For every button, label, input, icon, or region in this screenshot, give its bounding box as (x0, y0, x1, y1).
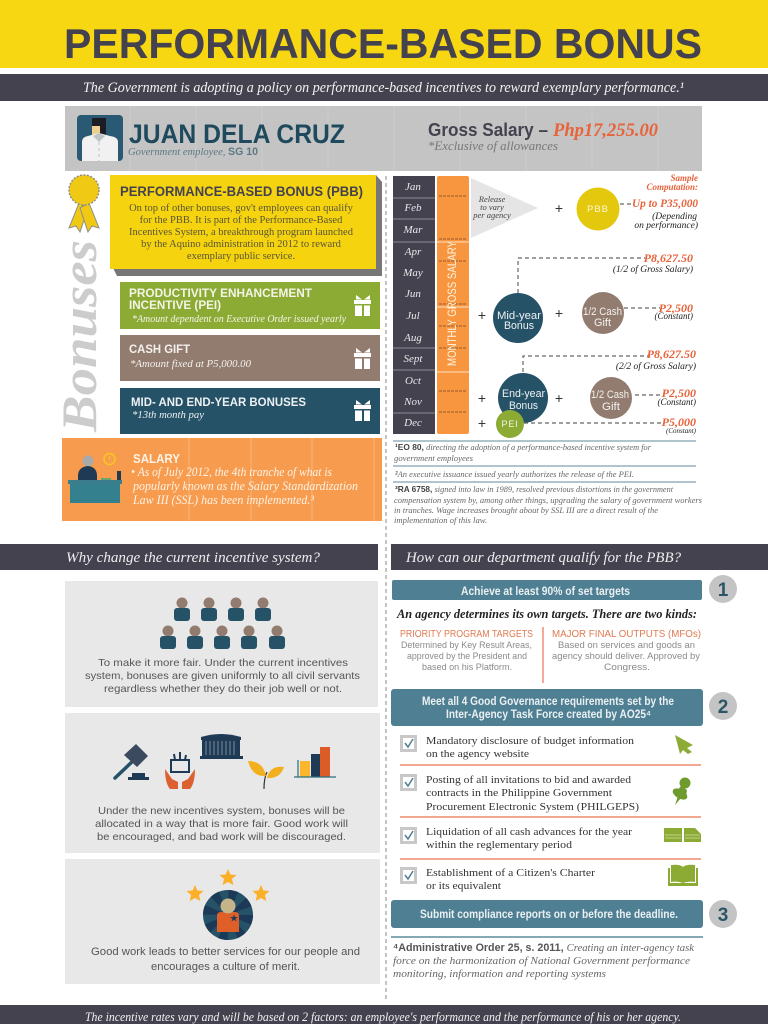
end-year row: Bonus (509, 400, 538, 412)
target types: based on his Platform. (422, 662, 512, 673)
footnotes 1 to 3 (393, 441, 703, 525)
end-year row: (2/2 of Gross Salary) (616, 361, 696, 372)
icon: cursor (675, 735, 693, 754)
release triangle (471, 178, 538, 238)
panel: PEI: INCENTIVE (PEI) (129, 298, 221, 312)
chart: monthly gross salary column: MONTHLY GROSS SALARY (447, 241, 459, 366)
panel: PBB: On top of other bonuses, gov't employees can qualify (129, 203, 354, 214)
step 3: Submit compliance reports on or before the deadline. (420, 909, 678, 921)
step 1: Achieve at least 90% of set targets (461, 586, 630, 598)
release triangle: per agency (472, 210, 511, 220)
target types: PRIORITY PROGRAM TARGETS (400, 629, 533, 640)
footnotes 1 to 3: ³RA 6758, signed into law in 1989, resolved previous distortions in the government (395, 484, 674, 494)
requirements checklist: Posting of all invitations to bid and awarded (426, 774, 632, 786)
PBB row: + (555, 200, 563, 216)
footnotes 1 to 3: compensation system by, among other things, upgrading the salary of government workers (394, 495, 703, 505)
chart: calendar column: Mar (403, 224, 423, 236)
panel: PBB: exemplary public service. (187, 251, 295, 262)
chart: calendar column: Jul (406, 310, 420, 322)
divider (385, 176, 387, 1000)
PEI row: PEI (502, 419, 518, 429)
icon: gift (354, 348, 371, 369)
checkbox 4 (402, 868, 416, 882)
chart: calendar column: Nov (403, 396, 422, 408)
footer bar (0, 1005, 768, 1024)
step number 2: 2 (718, 697, 728, 718)
icon: employee avatar (77, 115, 123, 161)
chart: calendar column (393, 176, 435, 434)
step number 1: 1 (718, 580, 729, 601)
PBB row: (Depending (652, 211, 697, 222)
PBB row (555, 188, 698, 231)
mid-year row: (Constant) (654, 311, 693, 321)
footnote 4: ⁴Administrative Order 25, s. 2011, Creating an inter-agency task (393, 942, 695, 954)
icon: official at desk (68, 454, 122, 503)
gross salary: *Exclusive of allowances (428, 138, 558, 153)
target types: Congress. (604, 662, 650, 673)
panel: fairness: To make it more fair. Under the current incentives (98, 657, 348, 669)
panel: employee profile (65, 106, 702, 171)
panel: mid- and end-year bonuses: MID- AND END-YEAR BONUSES (131, 395, 306, 409)
step 1 (392, 575, 737, 603)
target types: Determined by Key Result Areas, (401, 640, 532, 651)
requirements checklist: Liquidation of all cash advances for the year (426, 826, 632, 838)
panel: PBB: Incentives System, a breakthrough program launched (129, 227, 354, 238)
gross salary: Php17,255.00 (552, 120, 658, 141)
target types: approved by the President and (407, 651, 527, 662)
mid-year row: Mid-year (497, 310, 541, 322)
step 3 (391, 900, 737, 928)
PEI row (478, 410, 697, 438)
panel: culture of merit: Good work leads to better services for our people and (91, 946, 360, 958)
chart: calendar column: Jun (405, 288, 421, 300)
footnote 4 (391, 937, 703, 980)
title: PERFORMANCE-BASED BONUS (64, 20, 702, 67)
end-year row (478, 347, 696, 423)
panel: new system: allocated in a way that is more fair. Good work will (95, 818, 348, 830)
panel: salary: popularly known as the Salary Standardization (132, 479, 358, 493)
chart: calendar column: Jan (405, 181, 421, 193)
header banner (0, 0, 768, 68)
step 2: Meet all 4 Good Governance requirements set by the (422, 696, 674, 708)
icon: stacks of money (664, 828, 701, 842)
end-year row: + (555, 390, 563, 406)
PEI row: (Constant) (666, 427, 697, 435)
footnotes 1 to 3: ¹EO 80, directing the adoption of a performance-based incentive system for (395, 442, 652, 452)
end-year row: (Constant) (657, 397, 696, 407)
mid-year row: P2,500 (659, 301, 693, 315)
checkbox 1 (402, 736, 416, 750)
icon: gavel (115, 744, 149, 780)
mid-year row: 1/2 Cash (583, 306, 622, 318)
step 2 (391, 689, 737, 726)
release triangle: Release (478, 194, 505, 204)
panel: salary (62, 438, 382, 521)
footer bar: The incentive rates vary and will be based on 2 factors: an employee's performance and the performance of his or her agency. (85, 1010, 681, 1024)
chart: calendar column: Dec (403, 417, 422, 429)
panel: PEI (120, 282, 380, 329)
requirements checklist: Mandatory disclosure of budget information (426, 735, 635, 747)
employee role: Government employee, SG 10 (128, 146, 258, 158)
panel: cash gift (120, 335, 380, 381)
chart: calendar column: Sept (404, 353, 423, 365)
requirements checklist: Establishment of a Citizen's Charter (426, 867, 595, 879)
panel: new system (65, 713, 380, 853)
chart: calendar column: May (402, 267, 423, 279)
requirements checklist: or its equivalent (426, 880, 501, 892)
mid-year row: + (478, 307, 486, 323)
chart: calendar column: Oct (405, 375, 422, 387)
mid-year row: (1/2 of Gross Salary) (613, 264, 693, 275)
end-year row: P2,500 (662, 386, 696, 400)
panel: mid- and end-year bonuses (120, 388, 380, 434)
chart: monthly gross salary column (437, 176, 469, 434)
panel: mid- and end-year bonuses: *13th month pay (132, 410, 204, 421)
chart: calendar column: Aug (403, 332, 422, 344)
subtitle bar: The Government is adopting a policy on performance-based incentives to reward exemplary performance.¹ (83, 80, 684, 96)
footnotes 1 to 3: government employees (394, 453, 474, 463)
icon: group of employees (160, 598, 285, 649)
release triangle: to vary (480, 202, 504, 212)
end-year row: + (478, 390, 486, 406)
section heading: how to qualify (391, 544, 768, 570)
mid-year row: Bonus (504, 320, 534, 332)
step number 1 (709, 575, 737, 603)
section heading: why change (0, 544, 378, 570)
icon: gift (354, 400, 371, 421)
mid-year row: + (555, 305, 563, 321)
panel: PBB (110, 175, 382, 276)
icon: push pin (671, 778, 690, 805)
PEI row: + (478, 415, 486, 431)
target types: An agency determines its own targets. There are two kinds: (396, 607, 697, 621)
section heading: why change: Why change the current incentive system? (66, 550, 320, 566)
panel: culture of merit: encourages a culture of merit. (151, 961, 300, 973)
end-year row: 1/2 Cash (591, 389, 629, 401)
panel: fairness: regardless whether they do their job well or not. (104, 683, 342, 695)
gross salary (428, 120, 658, 153)
sample computation label (646, 173, 698, 192)
mid-year row: Gift (594, 317, 611, 329)
footnote 4: force on the harmonization of National Government performance (393, 955, 690, 967)
section heading: how to qualify: How can our department qualify for the PBB? (405, 550, 681, 566)
icon: government building (200, 734, 243, 759)
requirements checklist: Procurement Electronic System (PHILGEPS) (426, 801, 639, 813)
chart: calendar column: Feb (403, 202, 422, 214)
step number 3: 3 (718, 905, 728, 926)
requirements checklist: within the reglementary period (426, 839, 573, 851)
step number 2 (709, 692, 737, 720)
requirements checklist: contracts in the Philippine Government (426, 787, 612, 799)
employee name: JUAN DELA CRUZ (129, 119, 345, 149)
target types: Based on services and goods an (558, 640, 695, 651)
PBB row: PBB (587, 204, 609, 215)
requirements checklist: on the agency website (426, 748, 529, 760)
panel: cash gift: *Amount fixed at P5,000.00 (130, 359, 252, 370)
panel: cash gift: CASH GIFT (129, 342, 191, 356)
end-year row: End-year (502, 388, 545, 400)
icon: gift (354, 295, 371, 316)
panel: PEI: PRODUCTIVITY ENHANCEMENT (129, 286, 313, 300)
sample computation label: Computation: (646, 182, 698, 192)
panel: PEI: *Amount dependent on Executive Order issued yearly (132, 314, 347, 325)
step number 3 (709, 900, 737, 928)
icon: starred employee (186, 869, 270, 940)
target types: agency should deliver. Approved by (552, 651, 700, 662)
panel: culture of merit (65, 859, 380, 984)
chart: calendar column: Apr (404, 246, 422, 258)
icon: book (668, 865, 698, 886)
panel: PBB: for the PBB. It is part of the Performance-Based (140, 215, 343, 226)
end-year row: Gift (602, 401, 620, 413)
icon: award ribbon (69, 175, 99, 232)
panel: fairness: system, bonuses are given uniformly to all civil servants (85, 670, 360, 682)
subtitle bar (0, 74, 768, 101)
panel: new system: Under the new incentives system, bonuses will be (98, 805, 345, 817)
icon: seedling (248, 761, 284, 789)
target types: MAJOR FINAL OUTPUTS (MFOs) (552, 629, 701, 640)
panel: salary: SALARY (133, 451, 180, 466)
checkbox 2 (402, 776, 416, 790)
sample computation label: Sample (670, 173, 698, 183)
PEI row: P5,000 (662, 415, 696, 429)
footnotes 1 to 3: implementation of this law. (394, 515, 487, 525)
end-year row: P8,627.50 (647, 347, 696, 361)
PBB row: on performance) (634, 220, 698, 231)
panel: salary: Law III (SSL) has been implemented.³ (132, 493, 314, 507)
PBB row: Up to P35,000 (632, 196, 698, 210)
step 2: Inter-Agency Task Force created by AO25⁴ (446, 709, 651, 721)
footnote 4: monitoring, information and reporting systems (393, 968, 606, 980)
panel: PBB: by the Aquino administration in 2012 to reward (141, 239, 342, 250)
requirements checklist (400, 735, 701, 892)
panel: salary: • As of July 2012, the 4th tranche of what is (131, 465, 332, 479)
footnotes 1 to 3: in tranches. Wage increases brought about by SSL III are a direct result of the (394, 505, 658, 515)
icon: hands holding (165, 752, 195, 789)
icon: bar chart (294, 747, 336, 777)
panel: fairness (65, 581, 378, 707)
gross salary: Gross Salary – (428, 120, 548, 140)
mid-year row (478, 251, 693, 343)
target types (396, 607, 701, 683)
mid-year row: P8,627.50 (644, 251, 693, 265)
vertical heading: Bonuses: Bonuses (51, 240, 107, 433)
footnotes 1 to 3: ²An executive issuance issued yearly authorizes the release of the PEI. (395, 469, 634, 479)
panel: new system: be encouraged, and bad work will be discouraged. (97, 831, 346, 843)
checkbox 3 (402, 828, 416, 842)
panel: PBB: PERFORMANCE-BASED BONUS (PBB) (120, 184, 363, 199)
